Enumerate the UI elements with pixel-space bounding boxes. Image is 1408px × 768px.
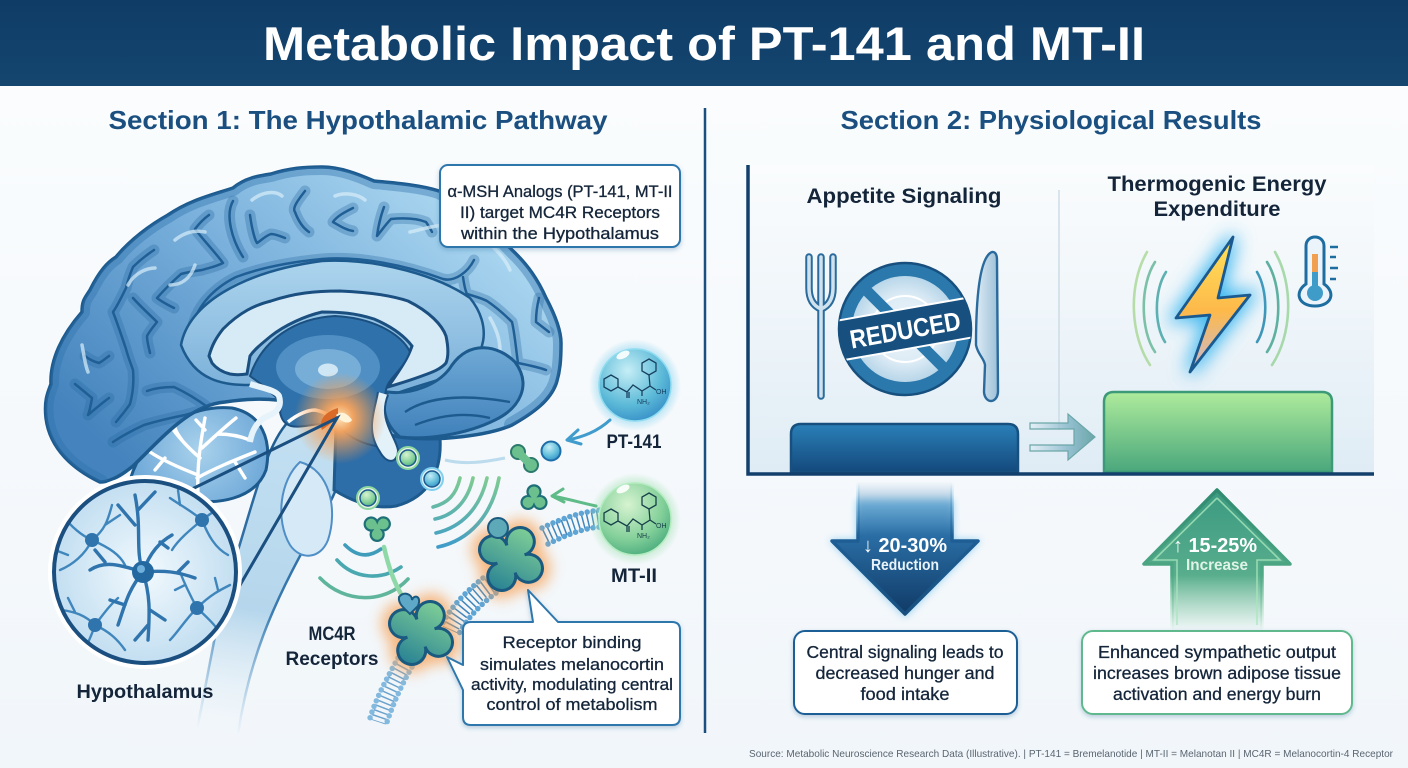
- icon: reduced plate: REDUCED: [847, 305, 963, 354]
- heading: section 2: Section 2: Physiological Results: [840, 105, 1262, 135]
- icon: energy waves: [1134, 252, 1288, 365]
- icon: reduced plate: [838, 262, 972, 396]
- callout: receptor binding: Receptor binding: [502, 633, 642, 652]
- bar: appetite: [791, 424, 1018, 472]
- cingulate band: [181, 261, 484, 395]
- membrane lower: [370, 658, 412, 725]
- label: MC4R receptors: MC4R: [308, 624, 356, 645]
- temporal lobe: [384, 348, 523, 438]
- callout: receptor binding: activity, modulating central: [471, 675, 673, 694]
- neurons: [55, 490, 232, 660]
- label: MT-II: MT-II: [611, 566, 657, 587]
- bound ligand upper: [488, 518, 508, 538]
- text box: appetite result: food intake: [860, 684, 950, 704]
- hypothalamus magnifier: [48, 475, 242, 669]
- text box: appetite result: decreased hunger and: [816, 663, 994, 683]
- molecule: MT-II: NH₂: [637, 533, 650, 540]
- arrow: 20-30% reduction: ↓ 20-30%: [863, 535, 947, 557]
- label: hypothalamus: Hypothalamus: [76, 682, 214, 703]
- molecule: PT-141: NH₂: [637, 399, 650, 406]
- text box: energy result: activation and energy burn: [1113, 684, 1321, 704]
- column heading: appetite: Appetite Signaling: [806, 185, 1002, 208]
- callout: receptor binding: [447, 590, 680, 725]
- column divider: [1058, 190, 1060, 430]
- bound ligand lower: [399, 594, 419, 614]
- signal arcs upper: [433, 478, 499, 547]
- temporal sulci: [405, 398, 510, 425]
- trefoil ligand lower: [362, 510, 395, 543]
- hypothalamus glow: [294, 372, 386, 464]
- arrow: 15-25% increase: Increase: [1186, 557, 1248, 574]
- membrane upper: [542, 510, 600, 544]
- label: MC4R receptors: [286, 624, 378, 670]
- callout: receptor binding: simulates melanocortin: [480, 655, 664, 674]
- arrow: 15-25% increase: [1144, 490, 1290, 632]
- brain cortex: [45, 167, 561, 482]
- bar: energy: [1104, 392, 1332, 472]
- molecule: PT-141: [589, 339, 681, 431]
- text box: energy result: increases brown adipose tissue: [1093, 663, 1341, 683]
- thalamus: [250, 316, 410, 461]
- callout: alpha-MSH analogs: α-MSH Analogs (PT-141, MT-II: [448, 183, 672, 201]
- column heading: thermogenic: Thermogenic Energy: [1108, 173, 1327, 196]
- arrow: between bars: [1030, 414, 1095, 460]
- brainstem: [196, 422, 344, 735]
- midbrain dark region: [334, 425, 440, 507]
- cerebellum: [130, 408, 268, 502]
- section divider: [704, 108, 706, 733]
- trefoil ligand upper: [522, 485, 546, 509]
- icon: lightning bolt: [1176, 237, 1250, 372]
- callout: alpha-MSH analogs: [440, 165, 680, 247]
- signal arcs lower: [320, 545, 408, 598]
- panel: hypothalamic pathway illustration: [45, 165, 681, 735]
- text box: energy result: Enhanced sympathetic output: [1098, 642, 1336, 662]
- axes: [748, 165, 1374, 474]
- blue ligand: [542, 442, 560, 460]
- molecule: MT-II: [589, 473, 681, 565]
- cortex folds: [45, 167, 561, 482]
- molecule: PT-141: OH: [656, 389, 666, 396]
- peanut ligand: [511, 445, 538, 472]
- molecule: MT-II: OH: [656, 523, 666, 530]
- icon: thermometer: [1299, 237, 1338, 306]
- membrane middle: [442, 578, 496, 636]
- particles on the brain: [357, 447, 505, 509]
- arrow: 15-25% increase: ↑ 15-25%: [1173, 535, 1257, 557]
- icon: lightning glow: [1176, 237, 1250, 372]
- chart background: [748, 165, 1374, 473]
- text box: appetite result: Central signaling leads to: [806, 642, 1004, 662]
- title: Metabolic Impact of PT-141 and MT-II: [263, 17, 1145, 70]
- heading: section 1: Section 1: The Hypothalamic Pathway: [108, 105, 608, 135]
- column heading: thermogenic: [1108, 173, 1327, 221]
- label: MC4R receptors: Receptors: [286, 649, 378, 670]
- arrow: 20-30% reduction: [832, 482, 978, 615]
- label: PT-141: PT-141: [606, 432, 662, 453]
- text box: energy result: [1082, 631, 1352, 714]
- icon: fork: [809, 257, 833, 396]
- callout: alpha-MSH analogs: II) target MC4R Receptors: [460, 204, 660, 222]
- corpus callosum: [209, 291, 448, 387]
- text box: appetite result: [794, 631, 1017, 714]
- icon: knife: [976, 252, 998, 401]
- arrow: MT-II to ligand: [552, 489, 596, 506]
- header banner: [0, 0, 1408, 86]
- callout: receptor binding: control of metabolism: [486, 695, 658, 714]
- magnifier pointer lines: [190, 418, 337, 592]
- column heading: thermogenic: Expenditure: [1154, 198, 1280, 221]
- callout: alpha-MSH analogs: within the Hypothalamus: [460, 225, 659, 243]
- arrow: PT-141 to ligand: [567, 420, 610, 444]
- source note: Source: Metabolic Neuroscience Research Data (Illustrative). | PT-141 = Bremelanotide | MT-II = Melanotan II | MC4R = Melanocortin-4 Receptor: [749, 748, 1393, 760]
- arrow: 20-30% reduction: Reduction: [871, 557, 939, 574]
- MC4R receptor lower: [375, 587, 467, 679]
- MC4R receptor upper: [465, 513, 557, 605]
- panel: physiological results chart: [748, 165, 1374, 474]
